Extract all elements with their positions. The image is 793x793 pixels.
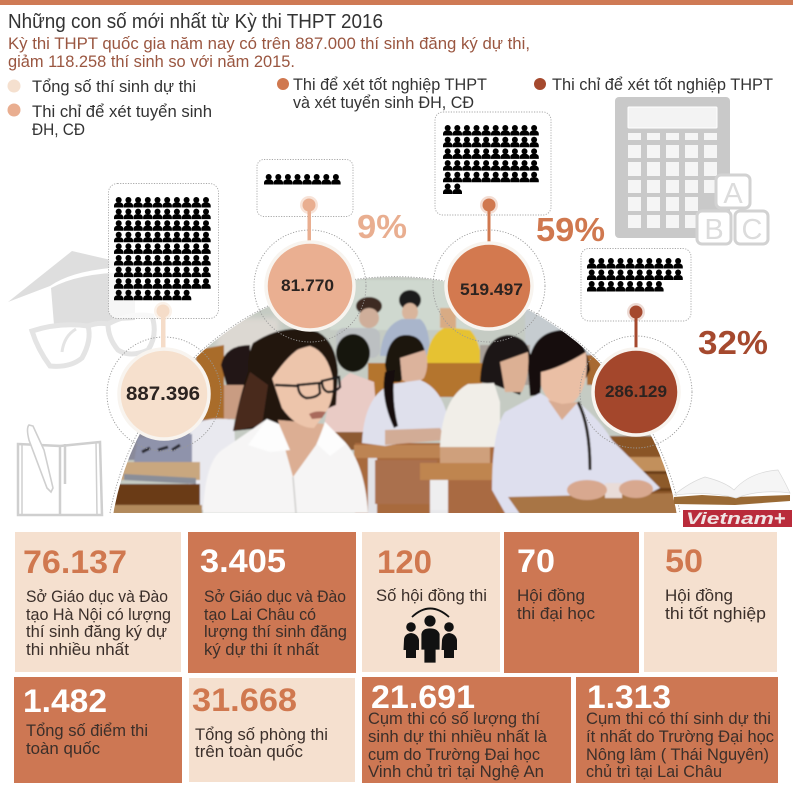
panel: 50: thi tốt nghiệp bbox=[665, 605, 766, 623]
icon: notebook and pen bbox=[18, 425, 102, 515]
bubble: 887.396 total bbox=[107, 302, 221, 451]
panel: total candidates pictogram bbox=[108, 184, 218, 318]
panel: 21.691: Cụm thi có số lượng thí bbox=[368, 710, 540, 728]
second row girl bbox=[335, 431, 364, 451]
panel: 1.482: 1.482 bbox=[23, 683, 107, 719]
icon: group of people bbox=[404, 608, 457, 663]
far-right desks bbox=[609, 435, 672, 495]
panel: graduation and admission pictogram bbox=[435, 112, 551, 215]
right desk back wood highlight bbox=[646, 474, 671, 488]
panel: 120: Số hội đồng thi bbox=[376, 587, 487, 605]
panel: 120 bbox=[362, 532, 500, 672]
left seated student bbox=[220, 344, 252, 386]
bubble: 887.396 total: 887.396 bbox=[126, 384, 200, 405]
panel: 1.482 bbox=[14, 677, 182, 783]
panel: 76.137: thí sinh đăng ký dự bbox=[26, 623, 167, 641]
logo: Vietnam+: + bbox=[774, 508, 786, 530]
percent: 32%: 32% bbox=[698, 324, 768, 361]
panel: 76.137: Sở Giáo dục và Đào bbox=[26, 588, 168, 606]
panel: 3.405: 3.405 bbox=[200, 543, 286, 579]
panel: 21.691: cụm do Trường Đại học bbox=[368, 746, 540, 764]
panel: 3.405: tạo Lai Châu có bbox=[204, 606, 316, 624]
panel: 3.405 bbox=[188, 532, 356, 673]
panel: 1.313: ít nhất do Trường Đại học bbox=[586, 728, 774, 746]
panel: 3.405: Sở Giáo dục và Đào bbox=[204, 588, 346, 606]
panel: 31.668: 31.668 bbox=[192, 682, 297, 718]
panel: 21.691: Vinh chủ trì tại Nghệ An bbox=[368, 763, 544, 781]
intro text: giảm 118.258 thí sinh so với năm 2015. bbox=[8, 53, 295, 71]
panel: 31.668: Tổng số phòng thi bbox=[195, 726, 328, 744]
bubble: 81.770 admission bbox=[254, 196, 366, 342]
panel: 50: 50 bbox=[665, 543, 703, 579]
panel: 31.668: trên toàn quốc bbox=[195, 743, 303, 761]
bubble: 286.129 graduation only: 286.129 bbox=[605, 382, 667, 401]
legend item: graduation and admission: Thi để xét tốt nghiệp THPT bbox=[293, 76, 487, 94]
panel: 1.313: 1.313 bbox=[587, 679, 671, 715]
legend item: admission only: Thi chỉ để xét tuyển sinh bbox=[32, 103, 212, 121]
logo: Vietnam+ bbox=[683, 508, 792, 530]
panel: 120: 120 bbox=[377, 544, 432, 580]
right girl hands and paper bbox=[567, 480, 653, 500]
main girl face bbox=[272, 346, 333, 428]
panel: 1.313: Nông lâm ( Thái Nguyên) bbox=[586, 746, 769, 764]
right girl hair bbox=[528, 330, 590, 396]
back row bbox=[399, 290, 421, 310]
legend item: admission only: ĐH, CĐ bbox=[32, 121, 85, 139]
panel: 21.691: sinh dự thi nhiều nhất là bbox=[368, 728, 548, 746]
title: Những con số mới nhất từ Kỳ thi THPT 2016 bbox=[8, 10, 383, 33]
panel: 1.482: toàn quốc bbox=[26, 740, 100, 758]
middle girl bbox=[385, 335, 425, 382]
panel: 50 bbox=[644, 532, 777, 672]
legend bbox=[8, 76, 773, 139]
panel: graduation-only pictogram bbox=[581, 248, 691, 321]
right girl shirt bbox=[492, 393, 660, 513]
intro text: Kỳ thi THPT quốc gia năm nay có trên 887.000 thí sinh đăng ký dự thi, bbox=[8, 35, 530, 53]
panel: 70 bbox=[504, 532, 639, 673]
right desk bbox=[508, 493, 680, 514]
panel: 70: thi đại học bbox=[517, 605, 595, 623]
bubble: 286.129 graduation only bbox=[580, 303, 692, 448]
panel: 1.313: Cụm thi có thí sinh dự thi bbox=[586, 710, 771, 728]
main girl glasses bbox=[275, 377, 340, 398]
photo: students in exam room bbox=[114, 277, 676, 513]
panel: 1.313 bbox=[576, 677, 778, 783]
bubble: 81.770 admission: 81.770 bbox=[281, 276, 334, 295]
icon: graduation cap and glasses bbox=[8, 251, 175, 366]
icon: open book bbox=[674, 470, 790, 505]
panel: admission-only pictogram bbox=[257, 160, 353, 216]
icon: ABC blocks bbox=[697, 175, 768, 246]
main girl shirt bbox=[203, 419, 368, 513]
panel: 70: Hội đồng bbox=[517, 587, 585, 605]
panel: 3.405: lượng thí sinh đăng bbox=[204, 623, 347, 641]
panel: 21.691 bbox=[362, 677, 571, 783]
legend item: total candidates: Tổng số thí sinh dự thi bbox=[32, 78, 196, 96]
panel: 1.482: Tổng số điểm thi bbox=[26, 722, 148, 740]
panel: 76.137 bbox=[15, 532, 181, 672]
panel: 1.313: chủ trì tại Lai Châu bbox=[586, 763, 722, 781]
icon: ABC blocks: A bbox=[723, 178, 743, 210]
bubble: 519.497 graduation and admission: 519.497 bbox=[460, 280, 523, 299]
legend item: graduation and admission bbox=[277, 76, 487, 112]
arch dotted outline bbox=[110, 277, 680, 513]
icon: ABC blocks: B bbox=[704, 214, 724, 246]
right-mid girl bbox=[480, 335, 531, 395]
panel: 50: Hội đồng bbox=[665, 587, 733, 605]
percent: 59%: 59% bbox=[536, 211, 605, 248]
main girl hair bbox=[233, 329, 338, 431]
wood desks center bbox=[355, 443, 505, 515]
intro text bbox=[8, 35, 530, 71]
panel: 76.137: thi nhiều nhất bbox=[26, 641, 129, 659]
logo: Vietnam+: Vietnam bbox=[686, 509, 774, 528]
main girl neck bbox=[278, 420, 325, 477]
legend item: graduation and admission: và xét tuyển sinh ĐH, CĐ bbox=[293, 94, 474, 112]
icon: ABC blocks: C bbox=[742, 214, 762, 246]
percent: 9%: 9% bbox=[357, 208, 407, 245]
right girl face bbox=[541, 352, 587, 406]
panel: 76.137: 76.137 bbox=[23, 544, 127, 580]
panel: 3.405: ký dự thi ít nhất bbox=[204, 641, 319, 659]
panel: 76.137: tạo Hà Nội có lượng bbox=[26, 606, 171, 624]
top bar bbox=[0, 0, 793, 5]
panel: 70: 70 bbox=[517, 543, 555, 579]
panel: 21.691: 21.691 bbox=[371, 679, 475, 715]
legend item: admission only bbox=[8, 103, 212, 139]
main girl collar bbox=[266, 418, 326, 452]
legend item: graduation only: Thi chỉ để xét tốt nghiệp THPT bbox=[552, 76, 773, 94]
icon: calculator bbox=[615, 97, 730, 238]
bubble: 519.497 graduation and admission bbox=[433, 196, 545, 342]
far-left area bbox=[128, 419, 206, 460]
back wood bench bbox=[368, 363, 482, 397]
panel: 31.668 bbox=[189, 678, 355, 782]
